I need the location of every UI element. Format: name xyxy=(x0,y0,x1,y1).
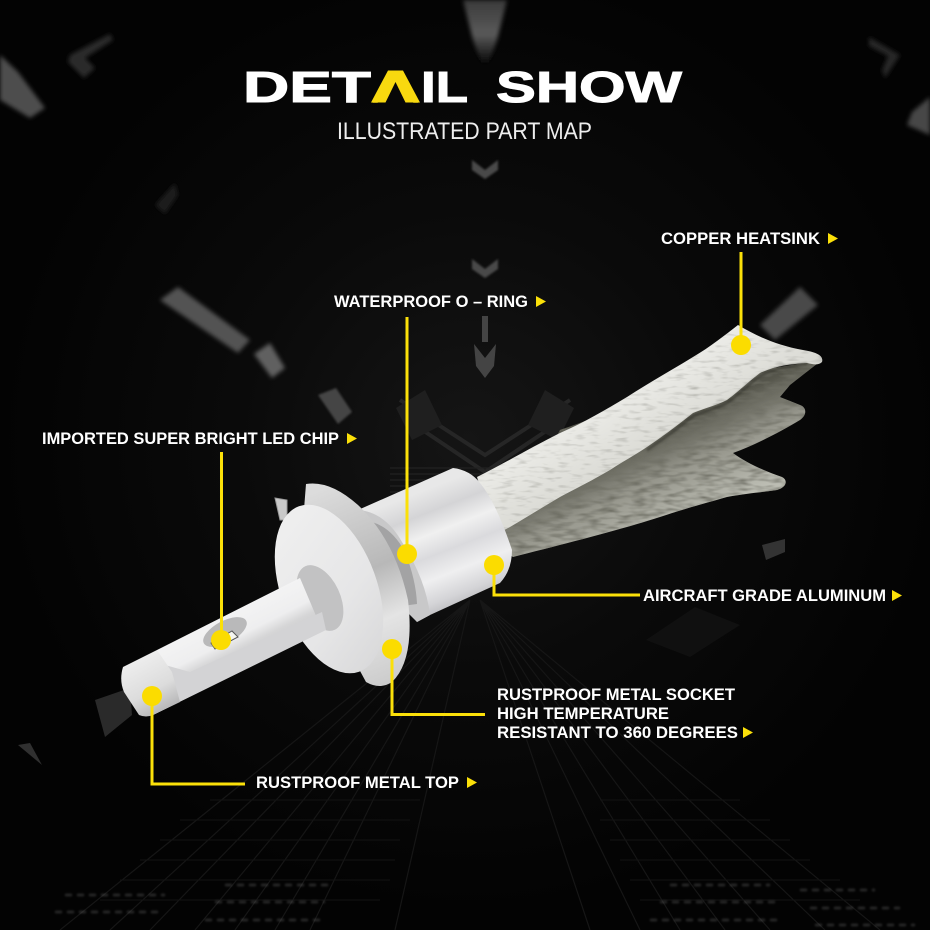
tab xyxy=(275,498,287,520)
title: SHOW xyxy=(496,63,683,112)
background wall details xyxy=(18,539,785,765)
title: A xyxy=(372,63,419,112)
label: metal top: RUSTPROOF METAL TOP xyxy=(256,773,459,792)
shaft xyxy=(153,578,322,715)
label: metal socket: RUSTPROOF METAL SOCKET xyxy=(497,685,736,704)
top centre bright bar xyxy=(463,0,507,62)
label: copper heatsink: COPPER HEATSINK xyxy=(661,229,821,248)
label: metal socket: HIGH TEMPERATURE xyxy=(497,704,669,723)
label: led chip: IMPORTED SUPER BRIGHT LED CHIP xyxy=(42,429,339,448)
socket outer flange xyxy=(300,483,410,686)
label: aluminum: AIRCRAFT GRADE ALUMINUM xyxy=(643,586,886,605)
top corner shapes xyxy=(0,34,930,214)
leader lines xyxy=(152,252,741,784)
label: metal socket xyxy=(497,685,753,742)
aluminium cylinder xyxy=(358,468,512,622)
socket collar xyxy=(287,558,353,638)
led slot xyxy=(199,611,251,653)
left and right tubes xyxy=(160,287,818,424)
tunnel floor grid xyxy=(60,600,880,930)
subtitle: ILLUSTRATED PART MAP xyxy=(337,118,592,145)
floor bright dashes xyxy=(55,885,915,925)
heatsink braid xyxy=(477,325,822,557)
bulb xyxy=(121,325,822,716)
title xyxy=(243,63,683,112)
title: IL xyxy=(421,63,468,112)
label: metal socket: RESISTANT TO 360 DEGREES xyxy=(497,723,738,742)
waterproof ring xyxy=(358,510,430,622)
title: DET xyxy=(243,63,371,112)
label: waterproof o-ring: WATERPROOF O – RING xyxy=(334,292,528,311)
marker dots xyxy=(142,335,751,706)
shaft plate shadow xyxy=(153,612,326,715)
centre chevrons xyxy=(472,160,498,278)
socket face disc xyxy=(254,490,404,688)
metal top cap xyxy=(121,650,180,716)
